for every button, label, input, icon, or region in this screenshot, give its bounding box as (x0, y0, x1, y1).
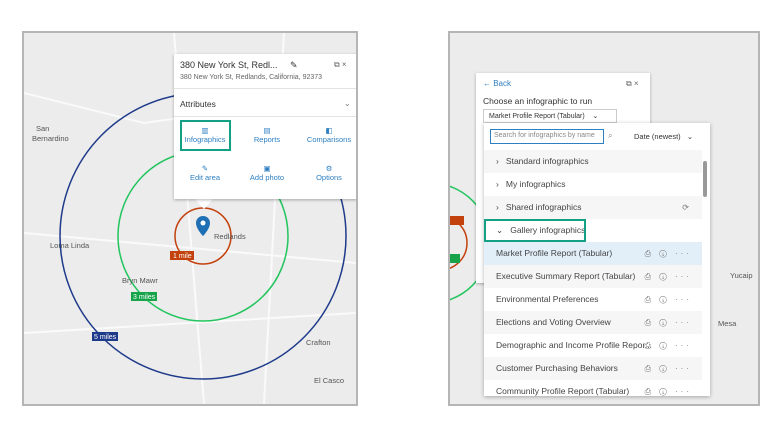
action buttons: ◧ (325, 126, 333, 135)
highlight: infographics (180, 120, 231, 151)
dropdown list: ⌄ Gallery infographics (496, 225, 585, 235)
dropdown list: ⟳ (682, 203, 692, 212)
map with radii: Mentone (306, 191, 335, 200)
map with radii: Redlands (214, 232, 246, 241)
map with radii: Bryn Mawr (122, 276, 158, 285)
dropdown list: Customer Purchasing Behaviors (496, 363, 618, 373)
popup: choose infographic: ← Back (483, 79, 511, 88)
action buttons (180, 120, 351, 182)
action buttons: Comparisons (307, 135, 351, 144)
action buttons: Infographics (185, 135, 225, 144)
action buttons: Add photo (250, 173, 284, 182)
popup: location card: 380 New York St, Redlands, California, 92373 (180, 74, 322, 81)
popup: location card: ⧉ × (334, 60, 347, 69)
dropdown list: ⎙ ⓘ ··· (645, 295, 692, 304)
map with radii: Crafton (306, 338, 331, 347)
action buttons: ▤ (263, 126, 271, 135)
panel: right infographic picker (448, 31, 760, 406)
map with radii: 1 mile (173, 253, 192, 260)
dropdown list: Elections and Voting Overview (496, 317, 611, 327)
map with radii (24, 33, 356, 404)
dropdown list: › Shared infographics (496, 202, 582, 212)
dropdown list: ⎙ ⓘ ··· (645, 341, 692, 350)
dropdown list: ⎙ ⓘ ··· (645, 249, 692, 258)
map with radii: El Casco (314, 376, 344, 385)
popup: location card: ⌄ (344, 99, 351, 108)
action buttons: Options (316, 173, 342, 182)
scrollbar (703, 161, 707, 197)
dropdown list: Executive Summary Report (Tabular) (496, 271, 635, 281)
panel: right infographic picker: Yucaip (730, 271, 753, 280)
popup: location card (174, 54, 360, 199)
dropdown list: › Standard infographics (496, 156, 589, 166)
dropdown list: ⎙ ⓘ ··· (645, 387, 692, 396)
popup: choose infographic (476, 73, 650, 283)
dropdown list: Environmental Preferences (496, 294, 599, 304)
dropdown list: Date (newest) ⌄ (634, 132, 693, 141)
dropdown list: Demographic and Income Profile Repor... (496, 340, 652, 350)
dropdown list: › My infographics (496, 179, 565, 189)
map with radii: Bernardino (32, 134, 69, 143)
panel: right infographic picker: Mesa (718, 319, 737, 328)
dropdown list: ⌕ (608, 131, 612, 140)
popup: choose infographic: ⧉ × (626, 79, 639, 88)
action buttons: ✎ (202, 164, 208, 173)
action buttons: Edit area (190, 173, 220, 182)
attributes row: Attributes (180, 99, 216, 109)
popup: choose infographic: Choose an infographic to run (483, 96, 592, 106)
dropdown list: Community Profile Report (Tabular) (496, 386, 629, 396)
map with radii: Loma Linda (50, 241, 90, 250)
action buttons: ▥ (201, 126, 209, 135)
popup: choose infographic: Market Profile Report (Tabular) ⌄ (489, 113, 598, 120)
popup title: 380 New York St, Redl... ✎ (180, 60, 298, 70)
panel: left map (22, 31, 358, 406)
action buttons: ⚙ (326, 164, 332, 173)
dropdown list: ⎙ ⓘ ··· (645, 272, 692, 281)
map with radii: San (36, 124, 49, 133)
dropdown list: ⎙ ⓘ ··· (645, 364, 692, 373)
search box (490, 129, 604, 144)
highlight: gallery (484, 219, 586, 242)
action buttons: ▣ (263, 164, 271, 173)
dropdown list (484, 123, 710, 396)
search box: Search for infographics by name (494, 132, 595, 139)
action buttons: Reports (254, 135, 280, 144)
dropdown list: Market Profile Report (Tabular) (496, 248, 612, 258)
map with radii: 5 miles (94, 334, 117, 341)
popup pointer (194, 198, 214, 209)
map with radii: 3 miles (133, 294, 156, 301)
dropdown list: ⎙ ⓘ ··· (645, 318, 692, 327)
